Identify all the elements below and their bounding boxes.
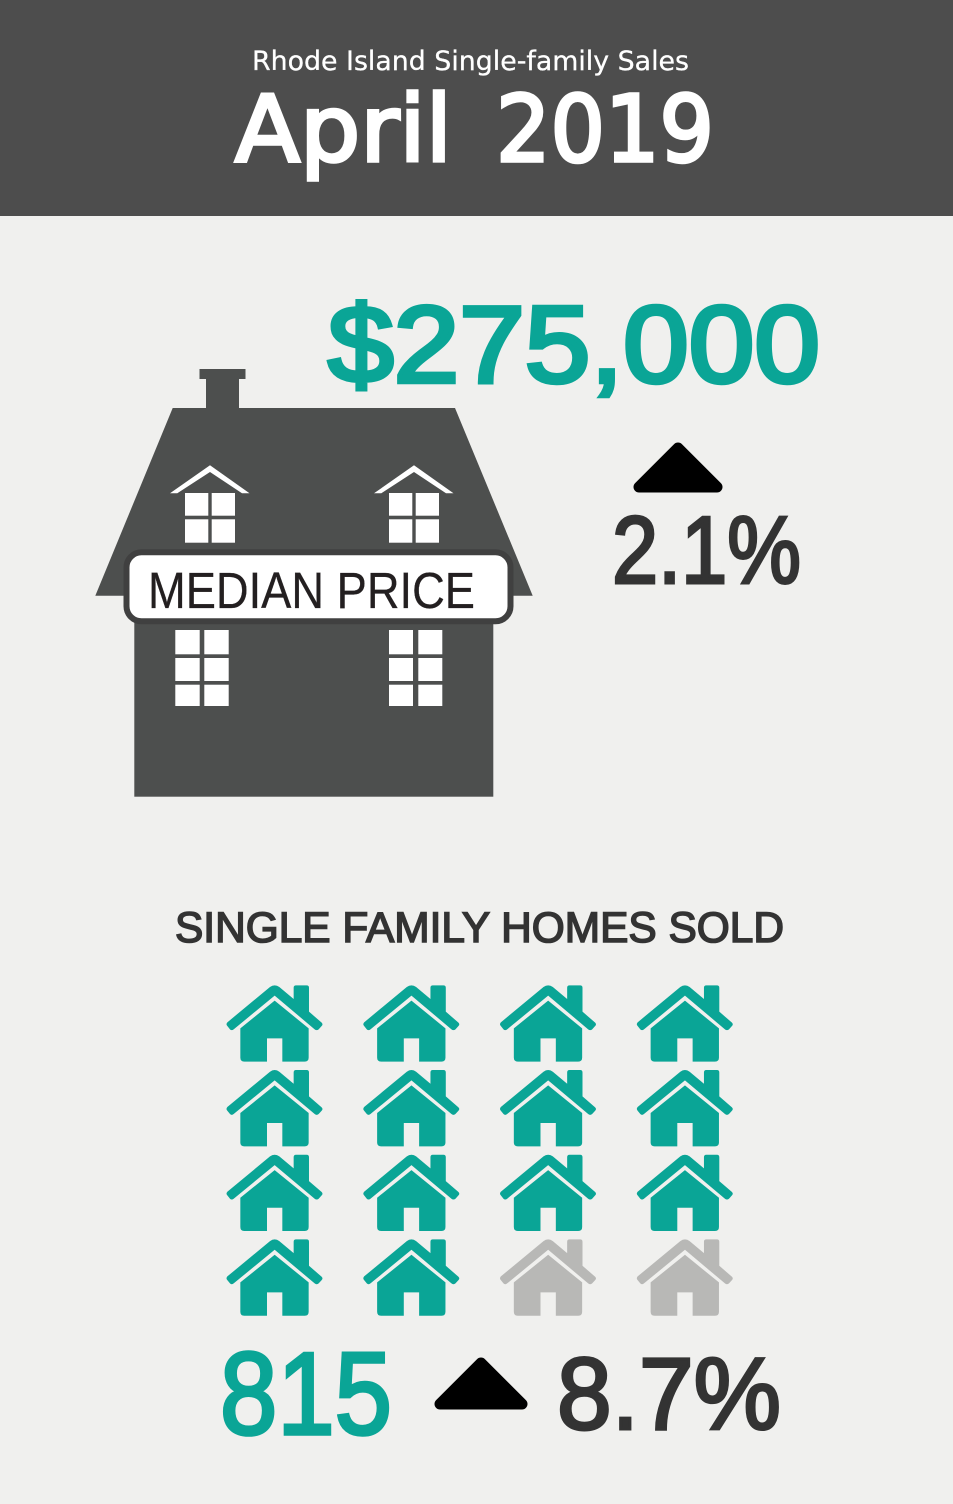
icon: large house with median price sign [95,369,533,797]
homes sold value: 815 [220,1328,392,1459]
house body [134,590,493,797]
homes sold heading: SINGLE FAMILY HOMES SOLD [175,904,784,952]
header title: 2019 [496,76,714,183]
header banner [0,0,953,216]
dormer window left [170,465,250,543]
header title [235,76,714,183]
roof [95,408,533,596]
header title: April [235,76,452,183]
lower window left [175,630,229,706]
icon: up triangle for homes sold [440,1363,522,1404]
pictogram: homes sold [226,985,733,1316]
homes sold change: 8.7% [557,1337,781,1451]
median price value: $275,000 [328,284,820,406]
median price sign: MEDIAN PRICE [148,562,475,619]
median price change: 2.1% [612,497,801,604]
icon: up triangle for price [639,448,717,487]
dormer window right [374,465,454,543]
chimney [200,369,246,410]
lower window right [389,630,442,706]
header subtitle: Rhode Island Single-family Sales [252,46,689,77]
